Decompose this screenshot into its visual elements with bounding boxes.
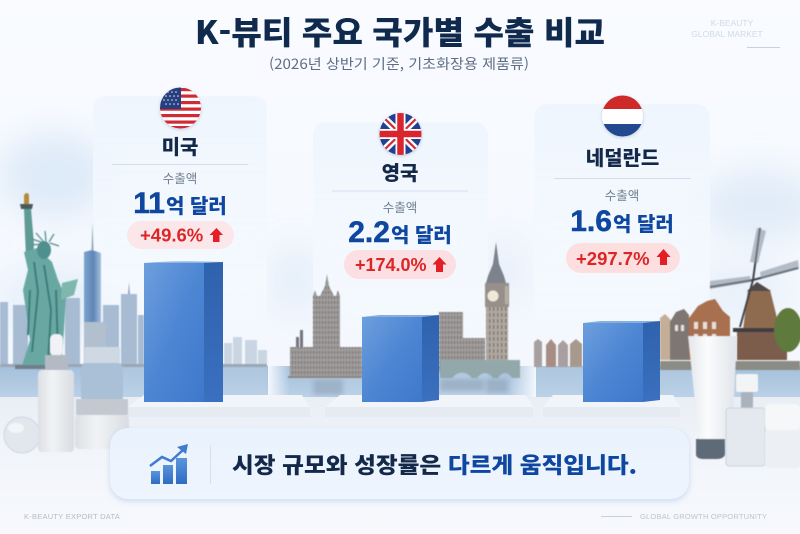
top-right tag: K-BEAUTY <box>711 18 754 28</box>
water reflection: London <box>313 379 508 395</box>
card: United States <box>93 96 267 406</box>
bottom callout <box>110 428 689 499</box>
podium platforms <box>128 395 680 417</box>
skyline: New York <box>0 222 267 367</box>
subtitle: (2026년 상반기 기준, 기초화장용 제품류) <box>269 54 529 74</box>
bar: Netherlands <box>583 321 660 402</box>
cosmetics right <box>688 336 800 468</box>
panel: United Kingdom <box>332 113 468 402</box>
growth badge: +297.7%: +297.7% <box>576 248 650 269</box>
growth badge: +174.0%: +174.0% <box>355 255 427 275</box>
top-right tag: GLOBAL MARKET <box>691 29 763 39</box>
callout message: 시장 규모와 성장률은 다르게 움직입니다. <box>232 448 637 480</box>
growth badge: +49.6% <box>127 221 234 249</box>
cosmetics left <box>4 334 129 453</box>
panel: United States <box>112 87 248 402</box>
icon: US flag <box>160 87 201 129</box>
label: 수출액: 수출액 <box>383 197 417 216</box>
cream jar <box>75 399 129 449</box>
value: 1.6억 달러: 1.6억 달러 <box>570 205 674 238</box>
bar: United States <box>144 261 223 402</box>
growth badge: +297.7% <box>566 243 680 273</box>
glass bottle <box>81 347 123 403</box>
statue of liberty <box>15 193 78 369</box>
value: 2.2억 달러: 2.2억 달러 <box>348 216 452 249</box>
label: 수출액: 수출액 <box>163 168 197 187</box>
icon: Netherlands flag <box>602 95 643 138</box>
top-right tag <box>691 18 780 48</box>
country name: 영국: 영국 <box>382 157 418 186</box>
icon: growth chart <box>150 444 188 484</box>
card: Netherlands <box>534 104 710 404</box>
growth badge: +174.0% <box>344 250 456 279</box>
skyline: Netherlands <box>534 228 800 370</box>
serum bottle <box>38 334 74 452</box>
title: K-뷰티 주요 국가별 수출 비교 <box>195 8 605 54</box>
label: 수출액: 수출액 <box>605 185 639 204</box>
glass sphere <box>4 417 40 453</box>
footer right: GLOBAL GROWTH OPPORTUNITY <box>640 512 767 521</box>
tube <box>688 336 737 445</box>
country name: 네덜란드: 네덜란드 <box>586 142 659 171</box>
skyline: London <box>288 242 520 395</box>
panel: Netherlands <box>554 95 691 402</box>
perfume bottle <box>726 374 765 466</box>
white jar <box>765 404 800 468</box>
country name: 미국: 미국 <box>162 131 198 160</box>
footer left: K-BEAUTY EXPORT DATA <box>24 512 120 521</box>
growth badge: +49.6%: +49.6% <box>140 224 203 246</box>
value: 11억 달러: 11억 달러 <box>133 187 227 220</box>
icon: UK flag <box>379 113 422 155</box>
bar: United Kingdom <box>362 315 439 402</box>
card: United Kingdom <box>313 122 488 407</box>
